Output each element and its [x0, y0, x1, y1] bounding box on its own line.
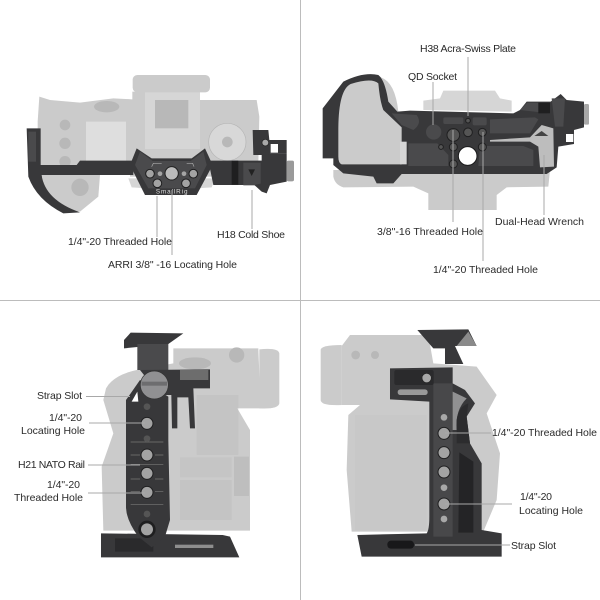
label: 1/4"-20 Threaded Hole: 1/4"-20: [47, 479, 80, 491]
leader lines: top view: [157, 190, 252, 255]
label: 1/4"-20 Threaded Hole: 1/4"-20 Threaded Hole: [68, 236, 172, 248]
panel: left side view of cage: [14, 333, 279, 557]
label: QD Socket: QD Socket: [408, 71, 457, 83]
label: Strap Slot: Strap Slot: [511, 540, 556, 552]
panel: right side view of cage: [321, 329, 597, 557]
cold shoe mount plate with SmallRig label: [130, 148, 213, 196]
cold shoe mount plate with SmallRig label: SmallRig: [156, 189, 188, 196]
camera: bottom view silhouette: [333, 77, 550, 210]
label: 1/4"-20 Locating Hole: 1/4"-20: [49, 412, 82, 424]
leader lines: left side view: [86, 396, 145, 493]
label: 1/4"-20 Locating Hole: 1/4"-20: [520, 491, 552, 503]
panel: bottom view of cage: [323, 43, 589, 276]
label: 1/4"-20 Locating Hole: Locating Hole: [21, 425, 85, 437]
camera: top view silhouette: [38, 75, 259, 212]
camera: left side silhouette: [102, 347, 279, 531]
label: 1/4"-20 Threaded Hole: [14, 479, 83, 504]
cage: bottom view plate: [323, 74, 589, 183]
label: H18 Cold Shoe: H18 Cold Shoe: [217, 229, 285, 241]
label: 1/4"-20 Threaded Hole: 1/4"-20 Threaded Hole: [433, 264, 538, 276]
label: 1/4"-20 Threaded Hole: 1/4"-20 Threaded Hole: [492, 427, 597, 439]
label: 3/8"-16 Threaded Hole: 3/8"-16 Threaded Hole: [377, 226, 483, 238]
label: 1/4"-20 Locating Hole: [519, 491, 583, 517]
cage: right side plate and grip: [357, 329, 502, 557]
label: ARRI 3/8" -16 Locating Hole: ARRI 3/8" -16 Locating Hole: [108, 259, 237, 271]
cage: left side base, top shoe and rail: [101, 333, 239, 557]
panel: top view of cage: [27, 75, 294, 271]
label: 1/4"-20 Threaded Hole: Threaded Hole: [14, 492, 83, 504]
cage: top view dark frame: [27, 128, 294, 213]
label: Dual-Head Wrench: Dual-Head Wrench: [495, 216, 584, 228]
label: 1/4"-20 Locating Hole: [21, 412, 85, 437]
label: Strap Slot: Strap Slot: [37, 390, 82, 402]
leader lines: bottom view: [433, 57, 544, 261]
label: H21 NATO Rail: H21 NATO Rail: [18, 459, 85, 471]
leader lines: right side view: [415, 433, 512, 545]
label: 1/4"-20 Locating Hole: Locating Hole: [519, 505, 583, 517]
label: H38 Acra-Swiss Plate: H38 Acra-Swiss Plate: [420, 43, 516, 55]
camera: right side silhouette: [321, 335, 500, 532]
